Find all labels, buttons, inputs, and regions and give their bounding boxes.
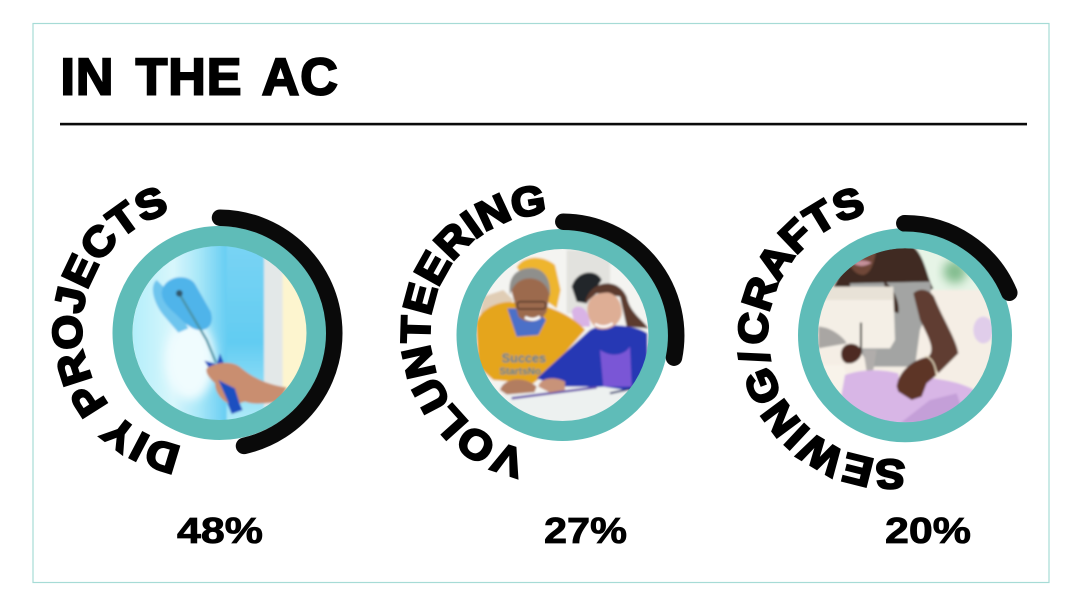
curved label: SEWING / CRAFTS [736,188,906,490]
stat: 48%: 48% [177,510,263,551]
photo: man and girl at table: Succes [502,352,546,366]
panel: volunteering [400,186,684,480]
title rule [60,123,1027,125]
stat: 20%: 20% [885,510,971,551]
panel: DIY projects [52,188,342,475]
photo: man and girl at table: StartsNo [499,366,541,377]
panel: sewing and crafts [736,188,1018,490]
black progress arc [563,222,676,358]
black progress arc [904,223,1009,293]
title: IN THE AC [60,48,339,106]
curved label: DIY PROJECTS [52,188,180,475]
photo: woman at sewing machine [817,247,993,423]
curved label: VOLUNTEERING [400,186,546,480]
teal ring [122,236,316,430]
teal ring [808,238,1002,432]
photo: paint roller on wall [132,246,306,420]
photo: man and girl at table [476,249,648,421]
black progress arc [220,218,334,446]
stat: 27%: 27% [544,510,627,551]
teal ring [466,239,658,431]
